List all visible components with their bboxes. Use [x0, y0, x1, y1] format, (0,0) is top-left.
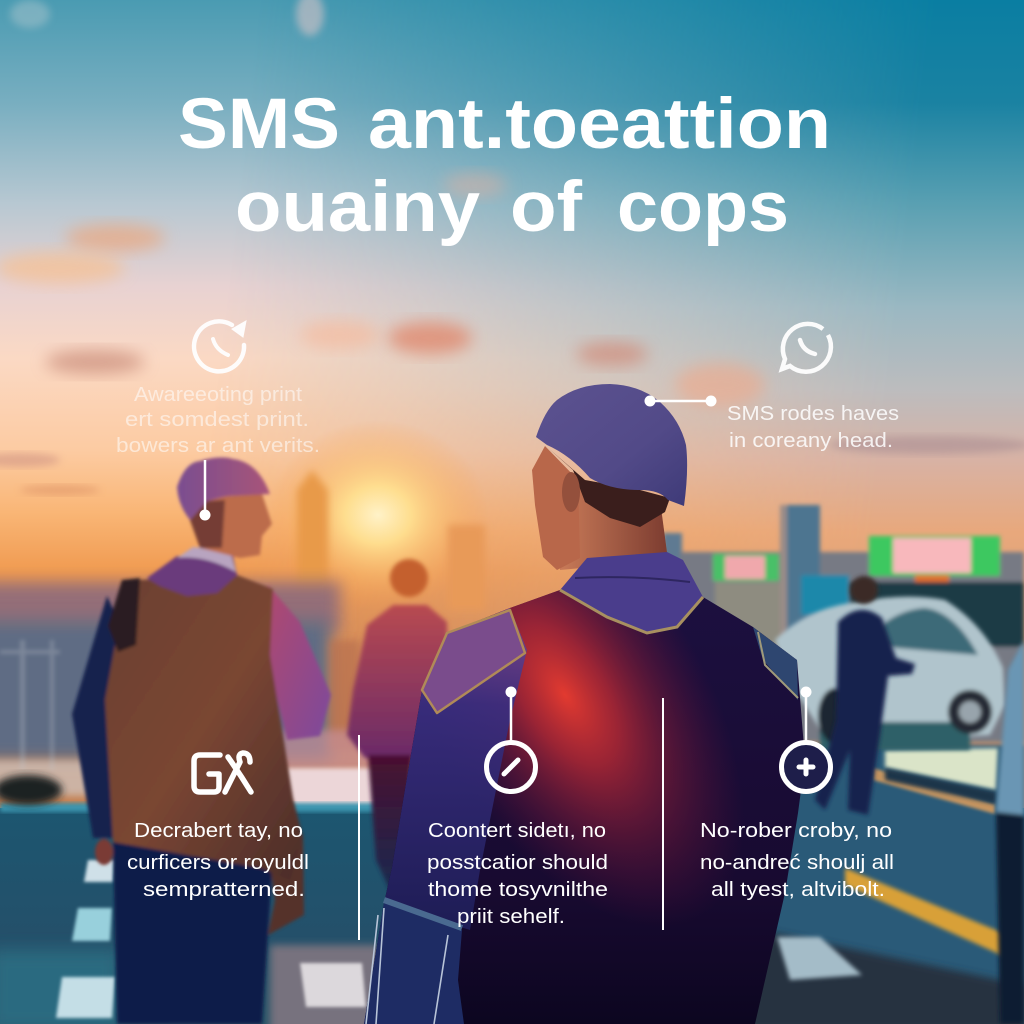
title: of — [510, 168, 582, 247]
callout text — [727, 403, 899, 452]
main man hair — [547, 447, 670, 527]
text: sempratterned. — [143, 879, 305, 901]
car — [775, 597, 1005, 750]
main man collar — [560, 552, 703, 633]
collar fold — [575, 577, 690, 582]
divider right — [662, 698, 664, 930]
title: ouainy — [235, 168, 481, 247]
clouds — [0, 0, 1024, 495]
text: curficers or royuldl — [127, 852, 309, 874]
title: SMS — [178, 85, 340, 164]
text: thome tosyvnilthe — [428, 879, 608, 901]
callout: top right — [644, 324, 899, 452]
callout text — [116, 384, 320, 457]
red flare — [490, 590, 730, 910]
background: sunset sky — [0, 0, 1024, 808]
main man shoulder patch — [422, 610, 525, 713]
pointer: main helmet — [644, 396, 716, 406]
icon: phone ring — [194, 321, 246, 371]
left man jeans — [113, 840, 272, 1024]
column: right bottom — [700, 686, 894, 901]
middle distant person — [347, 559, 448, 895]
text — [127, 820, 309, 901]
collar piping — [560, 590, 703, 633]
icon: GX mark — [194, 753, 251, 792]
far right person edge — [996, 640, 1024, 1024]
person by car — [815, 576, 915, 815]
right panel — [753, 627, 798, 700]
text: all tyest, altvibolt. — [711, 879, 885, 901]
left man — [72, 457, 331, 1024]
text: Decrabert tay, no — [134, 820, 303, 842]
text — [700, 820, 894, 901]
title: cops — [617, 168, 789, 247]
text: No-rober croby, no — [700, 820, 892, 842]
main man ear — [562, 472, 580, 512]
callout text: bowers ar ant verits. — [116, 435, 320, 457]
pointer: left helmet — [200, 460, 210, 520]
main man jacket body — [364, 590, 804, 1024]
left man right sleeve — [268, 585, 331, 740]
skyline towers — [297, 470, 485, 610]
left man collar — [147, 556, 237, 596]
sun — [268, 420, 488, 610]
title — [178, 85, 831, 247]
main man right seam — [758, 632, 798, 698]
text: posstcatior should — [427, 852, 608, 874]
icon: slash circle with pointer — [486, 686, 536, 792]
left man face — [190, 494, 272, 558]
divider left — [358, 735, 360, 940]
text: no-andreć shoulj all — [700, 852, 894, 874]
callout text: Awareeoting print — [134, 384, 302, 406]
left man strap — [108, 578, 140, 652]
text: Coontert sidetı, no — [428, 820, 606, 842]
main man helmet — [536, 384, 687, 506]
icon: chat bubble phone — [782, 324, 831, 372]
right street scene: shops — [663, 505, 1024, 742]
left man helmet — [177, 457, 270, 520]
main man neck — [560, 480, 668, 570]
callout text: SMS rodes haves — [727, 403, 899, 425]
icon: plus circle with pointer — [782, 686, 830, 792]
text — [427, 820, 608, 928]
horizon and terrace — [0, 582, 1024, 1024]
callout text: in coreany head. — [729, 430, 893, 452]
column: left bottom — [127, 753, 309, 901]
road — [740, 745, 1024, 1024]
title: ant.toeattion — [368, 85, 831, 164]
left man vest — [105, 575, 303, 880]
main man cuff — [364, 900, 464, 1024]
callout text: ert somdest print. — [125, 409, 309, 431]
callout: top left — [116, 321, 320, 457]
left man left sleeve — [72, 596, 118, 838]
main man — [313, 384, 820, 1024]
left sleeve — [384, 608, 527, 930]
text: priit sehelf. — [457, 906, 565, 928]
column: centre bottom — [427, 686, 608, 928]
left man hand — [268, 835, 304, 935]
main man face — [532, 446, 580, 570]
